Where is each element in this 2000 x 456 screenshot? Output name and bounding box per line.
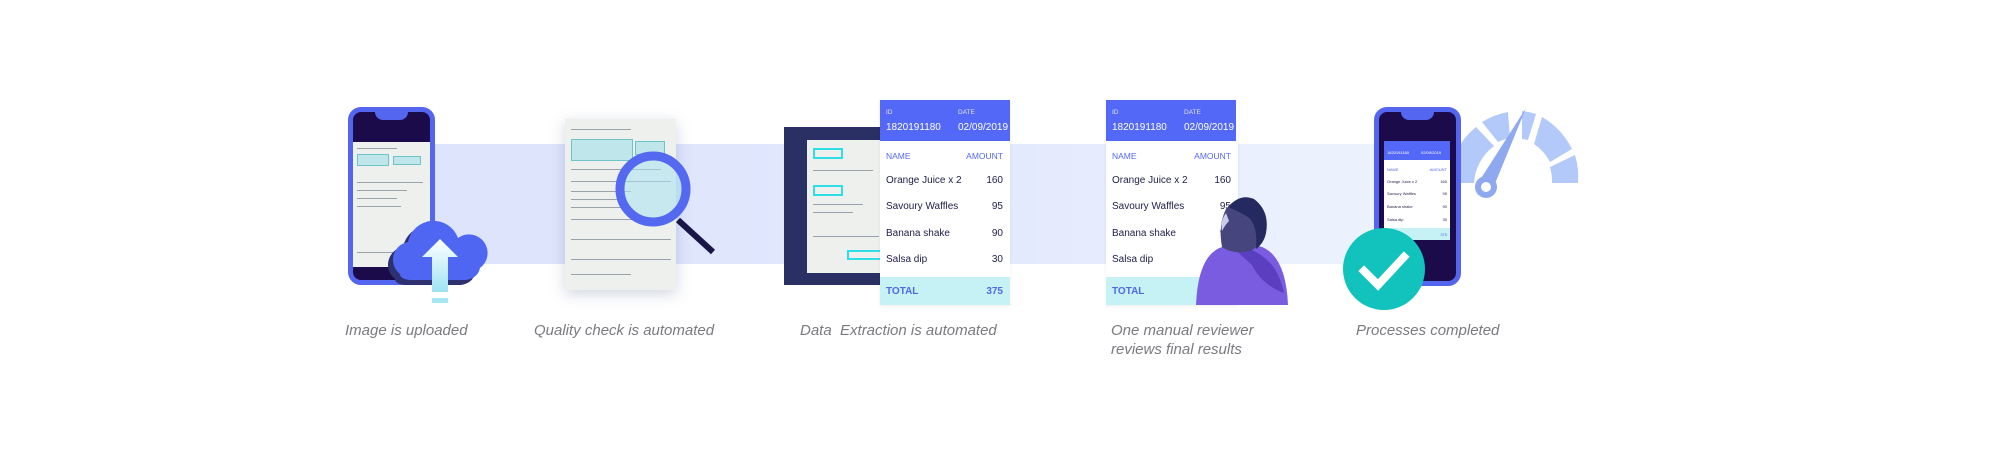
phone with mini table: NAME	[1387, 167, 1399, 172]
table: 95	[992, 201, 1003, 212]
table: AMOUNT	[1194, 151, 1231, 161]
icon: check circle	[1343, 228, 1425, 310]
table: 160	[986, 175, 1003, 186]
phone with mini table: Salsa dip	[1387, 217, 1403, 222]
table: DATE	[1184, 109, 1201, 116]
table: Banana shake	[886, 228, 950, 239]
icon: gauge	[1461, 108, 1578, 198]
table: 95	[1220, 201, 1231, 212]
table: 160	[1214, 175, 1231, 186]
table: NAME	[1112, 151, 1137, 161]
table: 90	[992, 228, 1003, 239]
icon: cloud upload	[388, 221, 488, 303]
caption: step 1: Image is uploaded	[345, 322, 468, 339]
table: AMOUNT	[966, 151, 1003, 161]
table: NAME	[886, 151, 911, 161]
table: 30	[1220, 254, 1231, 265]
table: ID	[886, 109, 892, 116]
table: TOTAL	[1112, 286, 1144, 297]
table: Orange Juice x 2	[1112, 175, 1188, 186]
table: 1820191180	[886, 122, 941, 133]
table: Savoury Waffles	[886, 201, 958, 212]
table: 02/09/2019	[958, 122, 1008, 133]
table: Orange Juice x 2	[886, 175, 962, 186]
step 4: manual reviewer	[1106, 100, 1288, 306]
table: DATE	[958, 109, 975, 116]
table: 375	[986, 286, 1003, 297]
caption: step 2: Quality check is automated	[534, 322, 714, 339]
phone with mini table: 90	[1443, 204, 1447, 209]
caption: step 4	[1111, 322, 1254, 358]
phone with mini table: 1820191180	[1387, 150, 1409, 155]
caption: step 4: reviews final results	[1111, 341, 1242, 358]
phone with mini table: Savoury Waffles	[1387, 191, 1416, 196]
caption: step 5: Processes completed	[1356, 322, 1499, 339]
receipt	[565, 119, 676, 290]
table: ID	[1112, 109, 1118, 116]
table: 02/09/2019	[1184, 122, 1234, 133]
step 1: phone with upload	[348, 107, 488, 303]
table	[1106, 100, 1238, 305]
step 2: receipt with magnifier	[558, 116, 715, 300]
step 3: data extraction	[784, 100, 1010, 306]
table: 1820191180	[1112, 122, 1167, 133]
table: Salsa dip	[886, 254, 927, 265]
phone with mini table: Banana shake	[1387, 204, 1413, 209]
dark frame with receipt	[784, 127, 884, 285]
icon: person	[1196, 197, 1288, 305]
phone with mini table: Orange Juice x 2	[1387, 179, 1417, 184]
caption: step 3: Data Extraction is automated	[800, 322, 997, 339]
table	[880, 100, 1010, 305]
table: 30	[992, 254, 1003, 265]
phone with mini table: 30	[1443, 217, 1447, 222]
icon: magnifier	[616, 152, 715, 254]
table: Salsa dip	[1112, 254, 1153, 265]
table: 90	[1220, 228, 1231, 239]
phone with mini table	[1374, 107, 1461, 286]
table: TOTAL	[886, 286, 918, 297]
phone with mini table: 375	[1440, 232, 1447, 237]
receipt on screen	[353, 142, 430, 267]
phone with mini table: AMOUNT	[1430, 167, 1447, 172]
step 5: processes completed	[1343, 107, 1578, 310]
phone with mini table: 95	[1443, 191, 1447, 196]
table: Banana shake	[1112, 228, 1176, 239]
phone	[348, 107, 435, 285]
phone with mini table: 02/09/2019	[1421, 150, 1441, 155]
table: Savoury Waffles	[1112, 201, 1184, 212]
background band	[380, 144, 1380, 264]
caption: step 4: One manual reviewer	[1111, 322, 1254, 339]
phone with mini table: 160	[1440, 179, 1447, 184]
